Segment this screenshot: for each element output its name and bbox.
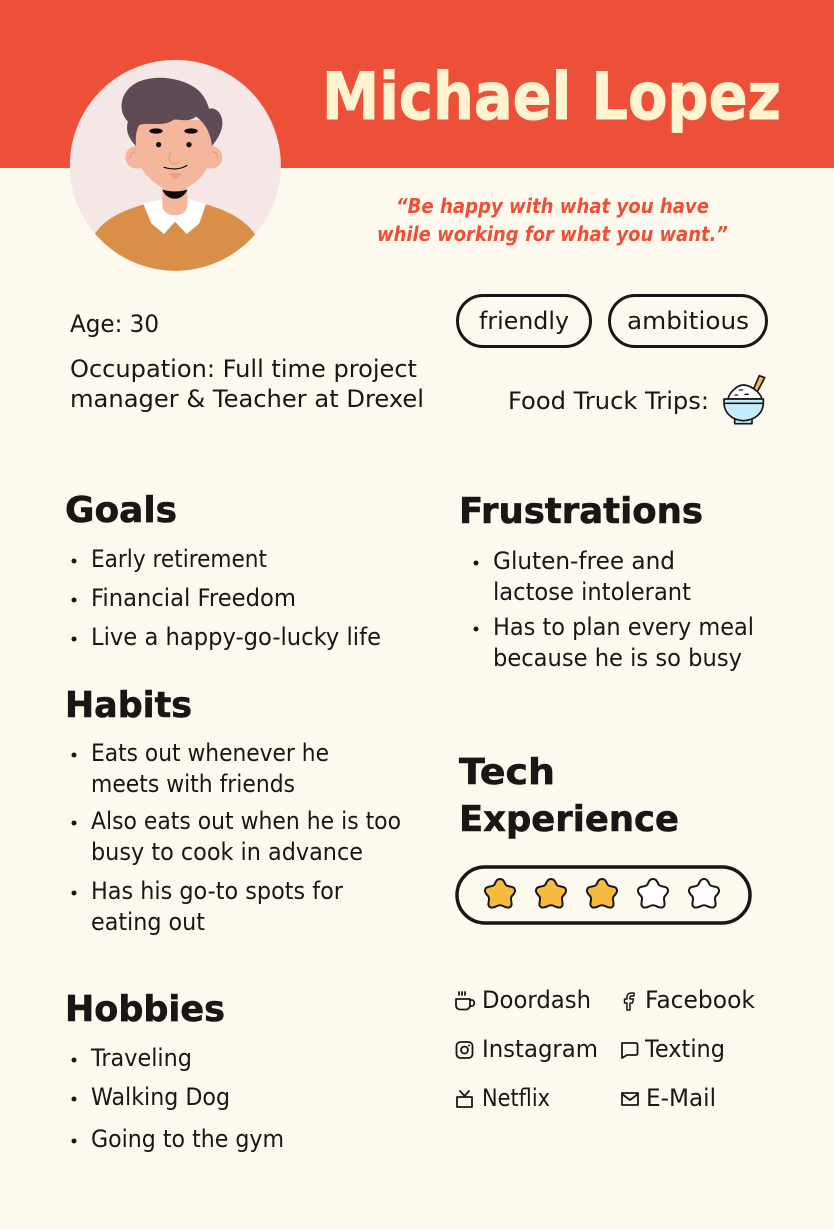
section: hobbies: Hobbies bbox=[65, 989, 225, 1030]
section: hobbies: Walking Dog bbox=[91, 1083, 230, 1111]
tag: friendly bbox=[458, 296, 590, 346]
section: habits: Has his go-to spots for bbox=[91, 877, 343, 905]
section: hobbies: Traveling bbox=[90, 1044, 192, 1072]
food truck trips label: Food Truck Trips: bbox=[508, 387, 709, 415]
tag: ambitious: ambitious bbox=[627, 307, 749, 335]
section: habits: eating out bbox=[91, 908, 205, 936]
tag: ambitious bbox=[610, 296, 766, 346]
section: goals: Financial Freedom bbox=[91, 584, 296, 612]
section: habits: busy to cook in advance bbox=[91, 838, 363, 866]
section: goals: Live a happy-go-lucky life bbox=[91, 623, 381, 651]
app: facebook: Facebook bbox=[645, 986, 755, 1014]
tag: friendly: friendly bbox=[479, 307, 569, 335]
section: frustrations: Has to plan every meal bbox=[493, 613, 754, 641]
avatar portrait bbox=[70, 60, 281, 271]
quote: while working for what you want.” bbox=[377, 222, 728, 246]
icon: rice bowl bbox=[724, 376, 765, 424]
section: frustrations bbox=[459, 491, 754, 672]
section: tech experience heading: Tech bbox=[459, 752, 555, 793]
section: habits: Eats out whenever he bbox=[91, 739, 329, 767]
section: habits bbox=[65, 685, 401, 936]
age: Age: 30 bbox=[70, 310, 159, 338]
section: goals: Goals bbox=[65, 490, 177, 531]
section: habits: Habits bbox=[65, 685, 192, 726]
quote bbox=[377, 194, 728, 246]
section: hobbies bbox=[65, 989, 284, 1153]
app: netflix: Netflix bbox=[482, 1084, 550, 1112]
app: doordash: Doordash bbox=[482, 986, 591, 1014]
section: frustrations: because he is so busy bbox=[493, 644, 742, 672]
section: tech experience heading bbox=[459, 752, 679, 840]
section: frustrations: Frustrations bbox=[459, 491, 703, 532]
section: frustrations: Gluten-free and bbox=[493, 547, 675, 575]
section: hobbies: Going to the gym bbox=[91, 1125, 284, 1153]
app: instagram: Instagram bbox=[482, 1035, 598, 1063]
title: Michael Lopez bbox=[322, 60, 781, 135]
section: habits: Also eats out when he is too bbox=[91, 807, 401, 835]
app: e-mail: E-Mail bbox=[646, 1084, 716, 1112]
occupation bbox=[70, 355, 424, 413]
section: habits: meets with friends bbox=[91, 770, 295, 798]
section: frustrations: lactose intolerant bbox=[493, 578, 691, 606]
occupation: manager & Teacher at Drexel bbox=[70, 385, 424, 413]
occupation: Occupation: Full time project bbox=[70, 355, 417, 383]
section: goals: Early retirement bbox=[91, 545, 267, 573]
section: tech experience heading: Experience bbox=[459, 799, 679, 840]
quote: “Be happy with what you have bbox=[396, 194, 709, 218]
star rating: 3 of 5 bbox=[457, 867, 750, 923]
app: netflix bbox=[457, 1084, 550, 1112]
header band bbox=[0, 0, 834, 168]
section: goals bbox=[65, 490, 381, 651]
app: texting: Texting bbox=[644, 1035, 725, 1063]
